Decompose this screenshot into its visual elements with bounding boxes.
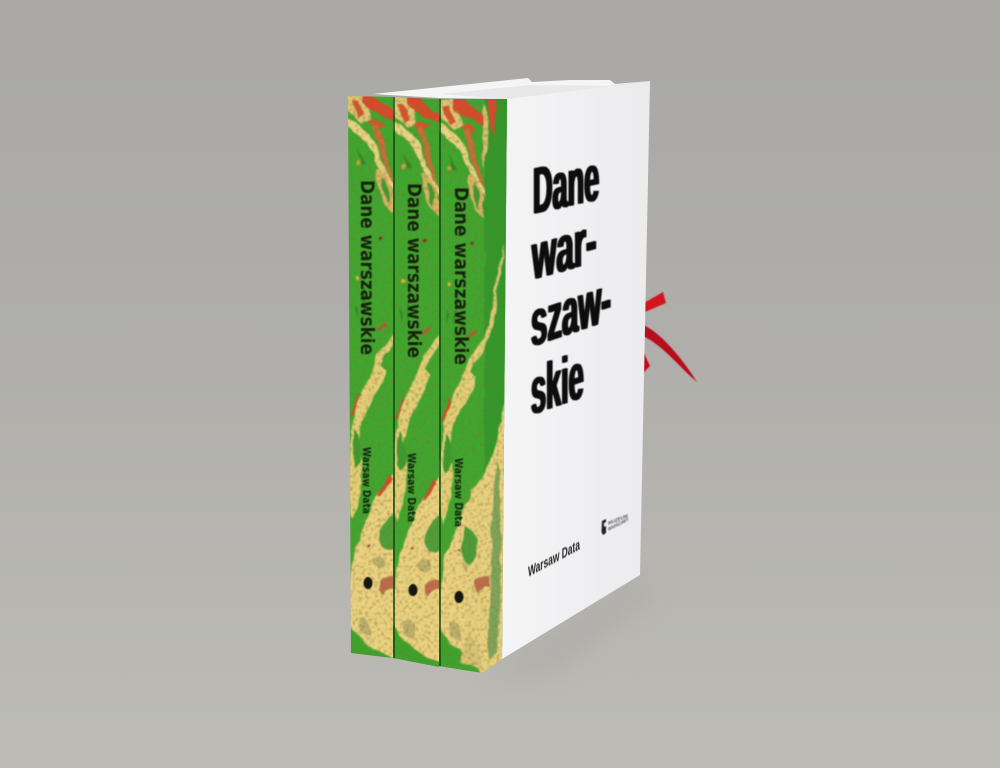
cover title: skie <box>531 337 584 429</box>
icon: museum logo: MUZEUM <box>608 513 628 527</box>
cover title: szaw- <box>531 260 611 361</box>
icon: red ribbons <box>643 292 697 382</box>
panel: spine of volume 2 <box>393 97 439 667</box>
panel: spine of volume 1 <box>348 96 393 658</box>
panel: front cover <box>502 81 650 659</box>
cover title: war- <box>531 203 596 295</box>
cover title: Dane <box>533 139 599 228</box>
icon: spine logo <box>408 584 418 596</box>
panel: spine of volume 3 <box>439 99 507 673</box>
spine subtitle: Warsaw Data <box>452 458 464 527</box>
floor shadow <box>490 575 660 680</box>
icon: spine logo <box>454 591 464 603</box>
icon: museum logo <box>602 513 629 535</box>
spine title: Dane warszawskie <box>450 187 472 365</box>
spine title: Dane warszawskie <box>356 180 378 355</box>
page block tops <box>373 78 649 99</box>
spine subtitle: Warsaw Data <box>405 453 417 522</box>
cover subtitle: Warsaw Data <box>528 536 581 581</box>
spine subtitle: Warsaw Data <box>360 447 372 514</box>
spine title: Dane warszawskie <box>403 183 425 358</box>
icon: spine logo <box>364 577 372 589</box>
cover title <box>531 139 611 429</box>
icon: museum logo: WARSZAWY <box>608 516 629 532</box>
